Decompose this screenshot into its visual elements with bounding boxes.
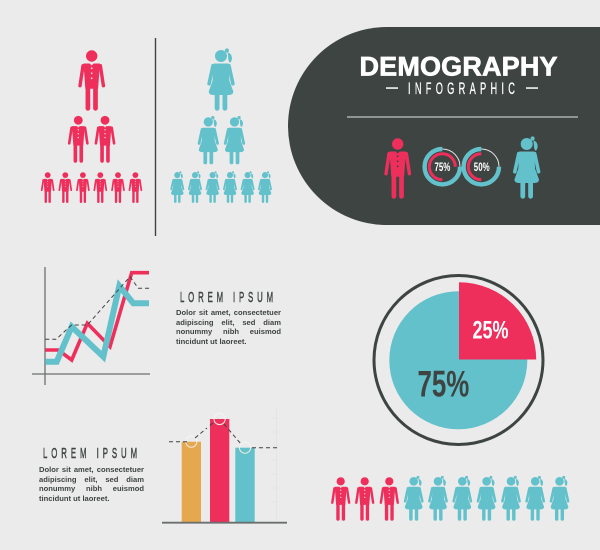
text block: right paragraph: nonummy nibh euismod [176,327,281,336]
text block: left paragraph: adipiscing elit, sed diam [39,475,144,484]
icon: medium woman left [199,116,218,162]
text block: right paragraph: Dolor sit amet, consectetuer [176,308,281,317]
bar chart [162,408,287,523]
donut: 75% [425,149,460,184]
text block: right paragraph [176,308,281,346]
icon: medium man left [69,116,87,161]
label: 75%: 75% [418,363,469,405]
text block: left paragraph [39,465,144,503]
line chart [32,267,150,385]
icon: woman [514,136,539,196]
title: DEMOGRAPHY [360,52,558,82]
label: 25%: 25% [472,315,509,344]
pie chart [374,276,543,444]
panel: demography header [288,27,600,225]
donut: 75%: 75% [434,162,450,175]
donut: 50%: 50% [474,162,490,175]
text block: left paragraph: nonummy nibh euismod [39,484,144,493]
text block: right paragraph: adipiscing elit, sed diam [176,318,281,327]
icon: man [386,138,409,196]
text block: right paragraph: tincidunt ut laoreet. [176,337,246,346]
pyramid: women [171,48,271,202]
icon: medium woman right [225,116,244,162]
people row [332,476,568,519]
heading: lorem ipsum left: LOREM IPSUM [43,444,137,462]
donut: 50% [464,149,499,184]
row of small women [171,171,271,202]
text block: left paragraph: Dolor sit amet, consectetuer [39,465,144,474]
row of small men [42,172,141,202]
text block: left paragraph: tincidunt ut laoreet. [39,494,109,503]
subtitle: INFOGRAPHIC [408,79,515,98]
icon: large man [80,50,103,108]
icon: large woman [209,48,233,108]
icon: medium man right [96,116,114,161]
pyramid: men [42,50,141,202]
heading: lorem ipsum right: LOREM IPSUM [180,288,273,306]
